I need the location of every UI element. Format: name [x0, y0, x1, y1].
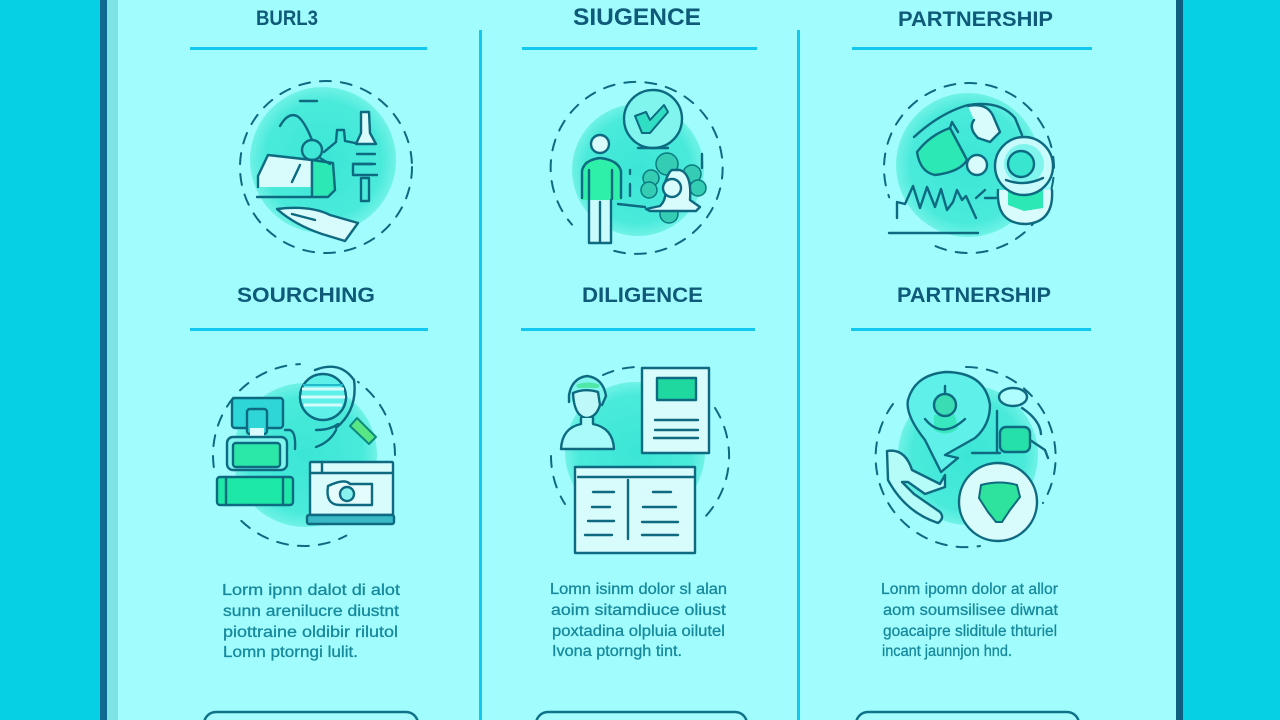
heading: top right: PARTNERSHIP — [898, 8, 1053, 31]
icon: sourcing computers and magnifier — [213, 364, 395, 546]
heading: diligence: DILIGENCE — [582, 284, 703, 307]
icon: diligence person, document and book — [551, 367, 729, 553]
icon: partnership pin, hand and shield — [876, 367, 1056, 547]
body text: partnership — [881, 581, 1059, 660]
body text: diligence: Ivona ptorngh tint. — [552, 643, 682, 660]
body text: partnership: Lonm ipomn dolor at allor — [881, 581, 1059, 598]
body text: partnership: aom soumsilisee diwnat — [883, 602, 1059, 619]
heading: top left: BURL3 — [256, 7, 318, 30]
heading: partnership: PARTNERSHIP — [897, 284, 1051, 307]
icon: top middle person, check badge and gear — [551, 82, 723, 254]
button: middle — [536, 712, 747, 720]
body text: partnership: incant jaunnjon hnd. — [882, 643, 1012, 660]
icon: top right partnership scene — [884, 83, 1054, 253]
body text: diligence — [550, 581, 727, 660]
body text: sourcing: sunn arenilucre diustnt — [223, 603, 400, 620]
body text: sourcing: piottraine oldibir rilutol — [223, 624, 398, 641]
body text: diligence: aoim sitamdiuce oliust — [551, 602, 727, 619]
body text: sourcing: Lorm ipnn dalot di alot — [222, 582, 401, 599]
body text: diligence: Lomn isinm dolor sl alan — [550, 581, 727, 598]
heading: top middle: SIUGENCE — [573, 4, 701, 31]
button: left — [204, 712, 418, 720]
body text: sourcing: Lomn ptorngi lulit. — [223, 644, 358, 661]
heading: sourcing: SOURCHING — [237, 284, 375, 307]
body text: sourcing — [222, 582, 401, 661]
body text: partnership: goacaipre sliditule thturiel — [883, 623, 1057, 640]
button: right — [856, 712, 1079, 720]
icon: top left sourcing tools and hand — [240, 81, 412, 253]
body text: diligence: poxtadina olpluia oilutel — [552, 623, 725, 640]
